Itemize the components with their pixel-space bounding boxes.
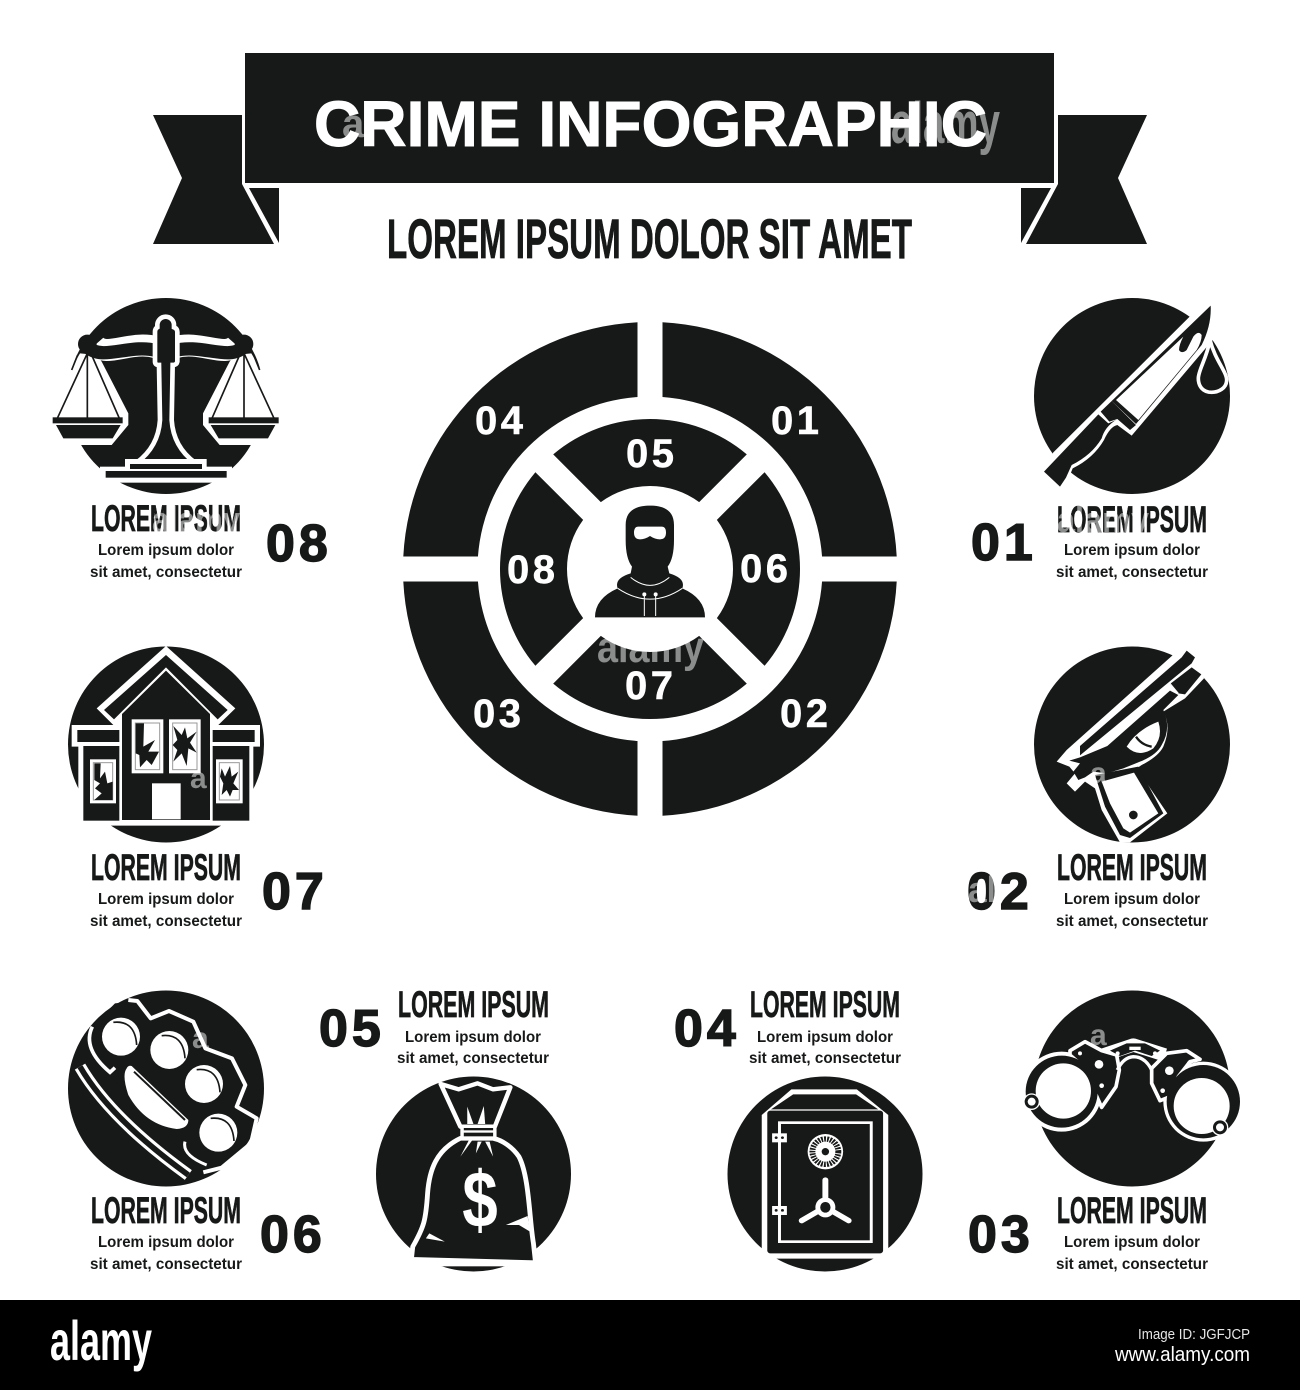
heading: LOREM IPSUM [398, 984, 549, 1025]
inner segment 08 [500, 472, 583, 666]
watermark overlays: al [968, 869, 996, 910]
icon: money bag [376, 1076, 571, 1272]
segment numbers: 05 [626, 432, 678, 476]
description [90, 891, 242, 930]
heading: LOREM IPSUM [750, 984, 900, 1025]
description: Lorem ipsum dolor [757, 1029, 893, 1046]
watermark overlays: a [192, 1022, 209, 1055]
icon: house with broken windows [68, 646, 264, 842]
banner panel [245, 53, 1054, 183]
panel: 02 handgun [967, 646, 1230, 930]
subtitle: LOREM IPSUM DOLOR SIT AMET [387, 207, 912, 270]
outer segment 03 [403, 582, 638, 816]
segment numbers: 07 [625, 664, 676, 708]
description [1056, 891, 1208, 930]
description: sit amet, consectetur [90, 1256, 242, 1273]
watermark overlays: alamy [891, 91, 1000, 156]
description: Lorem ipsum dolor [98, 542, 234, 559]
description [90, 542, 242, 581]
heading: LOREM IPSUM [91, 498, 241, 539]
watermark overlays: alamy [152, 499, 240, 540]
description [90, 1234, 242, 1273]
description: sit amet, consectetur [1056, 1256, 1208, 1273]
description: sit amet, consectetur [90, 564, 242, 581]
number: 07 [262, 863, 328, 921]
description: Lorem ipsum dolor [98, 891, 234, 908]
icon: knife with drop [1034, 298, 1230, 494]
heading: LOREM IPSUM [91, 1190, 241, 1231]
outer segment 02 [662, 582, 897, 816]
icon: pistol [1034, 646, 1230, 842]
number: 02 [967, 863, 1033, 921]
footer bar [0, 1300, 1300, 1390]
description [1056, 542, 1208, 581]
number: 04 [674, 1000, 740, 1058]
description: Lorem ipsum dolor [1064, 1234, 1200, 1251]
watermark overlays: a [1090, 1019, 1107, 1052]
title: CRIME INFOGRAPHIC [314, 88, 987, 160]
description [1056, 1234, 1208, 1273]
description [749, 1029, 901, 1067]
description [397, 1029, 549, 1067]
heading: LOREM IPSUM [91, 847, 241, 888]
footer logo: alamy [50, 1309, 152, 1372]
ribbon tail right [1021, 115, 1147, 244]
panel: 06 brass knuckles [68, 990, 326, 1273]
website: www.alamy.com [1114, 1344, 1250, 1366]
segment numbers: 04 [475, 399, 526, 443]
description: sit amet, consectetur [397, 1050, 549, 1067]
number: 06 [260, 1206, 326, 1264]
panel: 07 damaged house [68, 646, 328, 930]
central donut chart [403, 322, 897, 816]
icon: handcuffs [1022, 990, 1243, 1186]
description: Lorem ipsum dolor [1064, 891, 1200, 908]
description: Lorem ipsum dolor [98, 1234, 234, 1251]
segment numbers: 08 [507, 548, 558, 592]
panel: 05 money bag [319, 984, 571, 1272]
number: 01 [971, 514, 1037, 572]
inner segment 07 [553, 636, 747, 719]
image id: Image ID: JGFJCP [1138, 1326, 1250, 1343]
watermark overlays: a [1090, 757, 1107, 790]
icon: scales of justice [50, 298, 281, 494]
panel: 01 bloody knife [971, 298, 1230, 581]
inner segment 05 [553, 419, 747, 502]
icon: safe [728, 1076, 922, 1272]
segment numbers: 06 [740, 547, 792, 591]
icon: masked criminal [595, 506, 705, 617]
watermark overlays: alamy [597, 623, 704, 672]
segment numbers: 02 [780, 692, 832, 736]
description: sit amet, consectetur [749, 1050, 901, 1067]
panel: 08 justice scales [50, 298, 332, 581]
watermark overlays: alamy [1057, 499, 1149, 540]
ribbon tail left [153, 115, 279, 244]
panel: 03 handcuffs [968, 990, 1243, 1273]
watermark overlays: a [190, 762, 207, 795]
title banner [153, 53, 1147, 244]
outer segment 04 [403, 322, 638, 556]
inner segment 06 [717, 472, 800, 666]
outer segment 01 [662, 322, 897, 556]
description: Lorem ipsum dolor [1064, 542, 1200, 559]
number: 03 [968, 1206, 1034, 1264]
icon: money bag: $ [462, 1156, 498, 1245]
number: 08 [266, 515, 332, 573]
segment numbers: 03 [473, 692, 524, 736]
icon: brass knuckles [68, 990, 264, 1186]
watermark overlays: a [342, 102, 365, 146]
description: sit amet, consectetur [1056, 913, 1208, 930]
description: sit amet, consectetur [1056, 564, 1208, 581]
watermark overlays [152, 91, 1149, 1055]
segment numbers [473, 399, 832, 736]
description: Lorem ipsum dolor [405, 1029, 541, 1046]
segment numbers: 01 [771, 399, 822, 443]
description: sit amet, consectetur [90, 913, 242, 930]
number: 05 [319, 1000, 385, 1058]
panel: 04 safe [674, 984, 922, 1272]
